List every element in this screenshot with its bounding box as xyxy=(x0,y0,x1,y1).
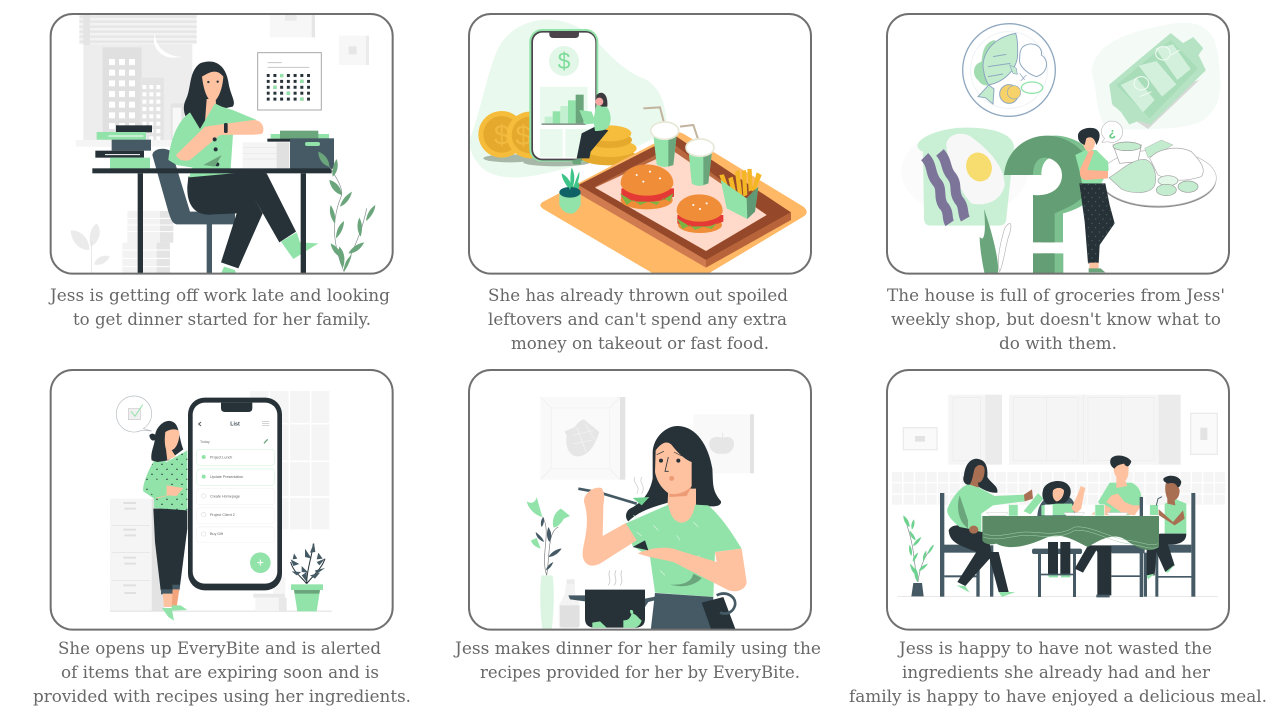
daughter and high chair xyxy=(1032,481,1085,597)
woman face and neck xyxy=(655,442,696,529)
caption: panel 3: The house is full of groceries from Jess' xyxy=(887,286,1225,306)
caption: panel 6: Jess is happy to have not wasted the xyxy=(897,639,1212,659)
seated girl xyxy=(572,93,611,164)
potted plant xyxy=(291,543,325,611)
right chairs xyxy=(1111,493,1195,597)
caption: panel 1: Jess is getting off work late and looking xyxy=(48,286,390,306)
casserole blob xyxy=(1091,23,1220,130)
phone with list app: Project Lunch xyxy=(210,455,232,459)
caption: panel 2: leftovers and can't spend any extra xyxy=(488,310,787,330)
stack of books xyxy=(95,125,152,169)
question mark xyxy=(1004,136,1100,274)
thinking man xyxy=(1075,128,1115,272)
table with cloth, glasses and plates xyxy=(982,505,1159,550)
kitchen cabinets xyxy=(948,395,1181,465)
phone with list app: Create Homepage xyxy=(210,494,240,498)
small potted plant xyxy=(559,168,581,214)
caption: panel 4: of items that are expiring soon and is xyxy=(61,663,379,683)
caption: panel 1: to get dinner started for her family. xyxy=(73,310,371,330)
card border xyxy=(887,370,1229,630)
arms xyxy=(583,488,747,591)
phone: $ xyxy=(558,48,571,74)
wall calendar xyxy=(258,53,321,110)
grey plant xyxy=(71,223,110,274)
ladle xyxy=(578,477,649,505)
caption: panel 4: She opens up EveryBite and is alerted xyxy=(58,639,381,659)
mint blob xyxy=(470,20,667,178)
phone with list app: Project Client 2 xyxy=(210,513,235,517)
fries xyxy=(719,169,762,219)
thought bubble: ¿ xyxy=(1109,125,1116,139)
caption: panel 6: ingredients she already had and her xyxy=(902,663,1211,683)
panel: family meal xyxy=(887,370,1229,630)
leaves at base xyxy=(980,209,1011,274)
filing cabinet xyxy=(110,499,164,611)
panel: working late xyxy=(51,14,393,274)
coins: $ xyxy=(516,120,532,151)
caption: panel 4 xyxy=(33,639,411,707)
phone with list app: List xyxy=(230,422,240,428)
apron xyxy=(651,593,736,631)
wall pictures xyxy=(903,413,1217,454)
woman hair xyxy=(626,426,721,521)
panel: cooking dinner xyxy=(469,370,811,631)
cooking pot xyxy=(568,570,662,628)
paper stacks xyxy=(122,211,173,274)
floor line xyxy=(897,596,1218,597)
background window xyxy=(250,391,329,529)
coins xyxy=(478,111,590,166)
coins: $ xyxy=(494,119,510,150)
card border xyxy=(469,14,811,274)
papers and file box xyxy=(243,131,334,169)
phone with list app: Today xyxy=(200,440,210,444)
caption: panel 5: recipes provided for her by EveryBite. xyxy=(480,663,800,683)
caption: panel 2 xyxy=(488,286,788,354)
coin stack xyxy=(580,125,637,165)
caption: panel 3 xyxy=(887,286,1225,354)
toast with egg and bacon xyxy=(917,128,1014,226)
flower vase xyxy=(527,497,570,631)
panel: no money for takeout xyxy=(469,14,811,274)
window with city skyline xyxy=(76,15,197,147)
mother xyxy=(947,459,1044,597)
card border xyxy=(469,370,811,630)
wall frames xyxy=(285,15,369,65)
son xyxy=(1147,476,1186,579)
burgers xyxy=(620,164,723,233)
card border xyxy=(51,14,393,274)
caption: panel 3: weekly shop, but doesn't know what to xyxy=(891,310,1221,330)
caption: panel 4: provided with recipes using her ingredients. xyxy=(33,687,411,707)
green plant xyxy=(318,152,375,272)
tile backsplash xyxy=(892,472,1226,506)
caption: panel 2: She has already thrown out spoiled xyxy=(488,286,788,306)
caption: panel 6: family is happy to have enjoyed a delicious meal. xyxy=(849,687,1267,707)
panel: full of groceries xyxy=(887,14,1229,274)
woman torso and head xyxy=(168,62,263,177)
floor line and small box xyxy=(110,577,332,612)
woman pointing at phone xyxy=(143,421,187,621)
woman legs xyxy=(187,172,318,274)
casserole dish xyxy=(1110,34,1205,129)
caption: panel 2: money on takeout or fast food. xyxy=(511,334,769,354)
potted plant xyxy=(903,515,934,596)
apple picture xyxy=(693,414,754,473)
phone with list app xyxy=(188,398,282,590)
card border xyxy=(887,14,1229,274)
panel: opens EveryBite xyxy=(51,370,393,630)
caption: panel 6 xyxy=(849,639,1267,707)
fish plate xyxy=(963,24,1055,116)
bottle xyxy=(559,579,580,628)
shirt xyxy=(625,505,742,597)
drink cups xyxy=(643,107,714,186)
speech bubble with checkmark xyxy=(116,396,152,432)
caption: panel 5: Jess makes dinner for her family using the xyxy=(453,639,821,659)
phone with list app: Update Presentation xyxy=(210,475,243,479)
tray xyxy=(578,136,791,268)
chair xyxy=(152,149,235,274)
placemat xyxy=(540,132,807,274)
father xyxy=(1075,455,1160,597)
card border xyxy=(51,370,393,630)
thought bubble xyxy=(1101,121,1123,142)
phone with list app: Buy Gift xyxy=(210,532,223,536)
chair left xyxy=(940,493,993,597)
phone xyxy=(529,29,598,162)
caption: panel 1 xyxy=(48,286,390,330)
desk xyxy=(92,168,332,274)
caption: panel 3: do with them. xyxy=(999,334,1117,354)
chicken meal plate xyxy=(1100,140,1216,208)
oven mitt picture xyxy=(540,397,625,480)
caption: panel 5 xyxy=(453,639,821,683)
